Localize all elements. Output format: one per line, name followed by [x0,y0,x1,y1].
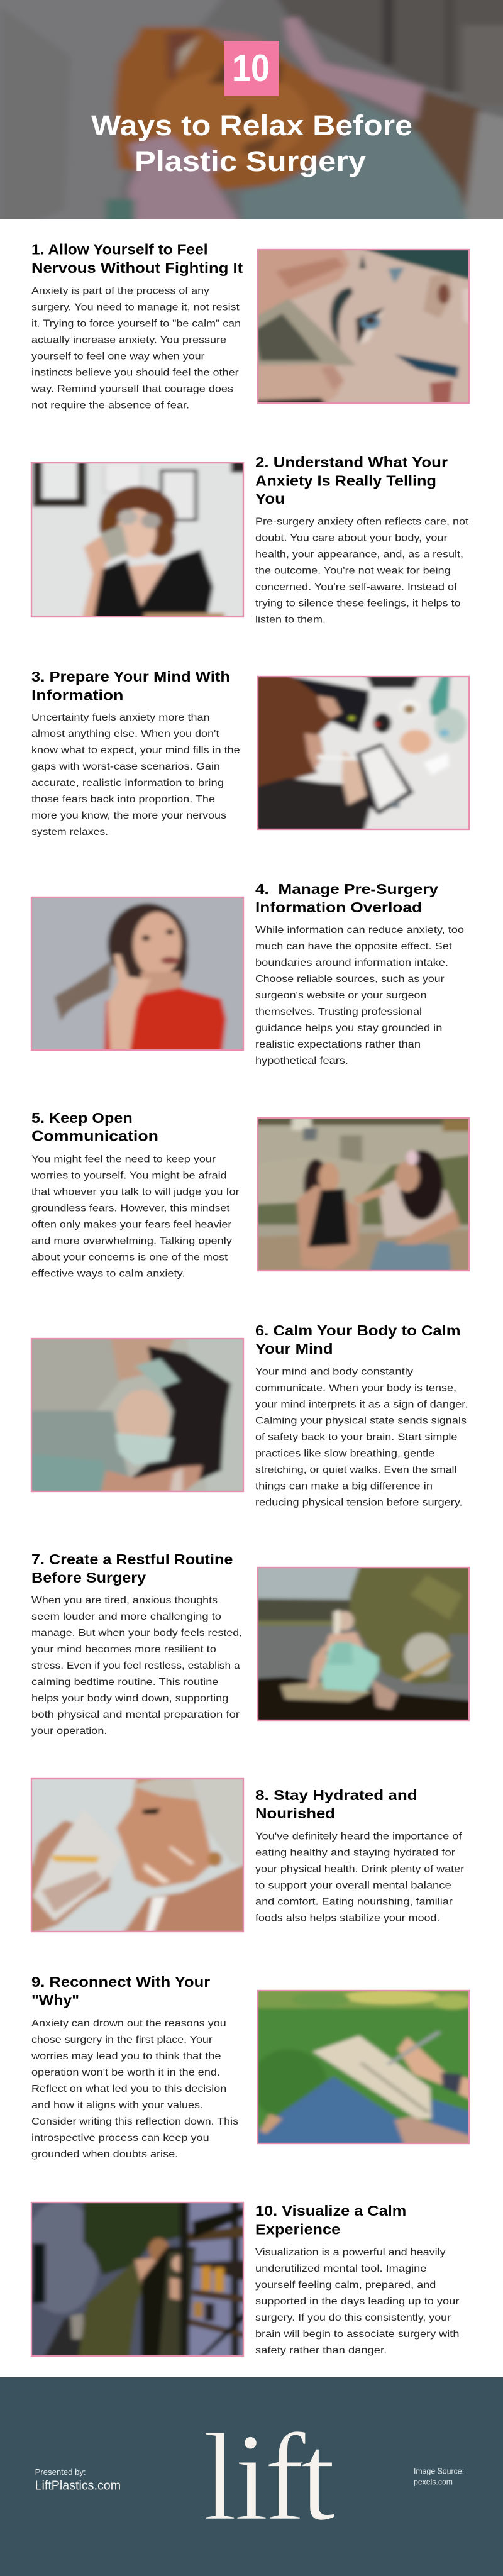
body text: step 6: Calming your physical state sends signals [255,1415,467,1426]
heading: step 8: Nourished [255,1805,335,1821]
body text: step 10: supported in the days leading up to your [255,2296,460,2307]
body text: step 10: underutilized mental tool. Imagine [255,2264,427,2274]
body text: step 3: more you know, the more your nervous [31,810,226,821]
heading: step 3: Information [31,687,123,703]
body text: step 8: foods also helps stabilize your mood. [255,1913,439,1923]
heading: step 7 [31,1551,233,1586]
body text: step 10 [255,2247,460,2356]
body text: step 1: not require the absence of fear. [31,401,189,411]
body text: step 1: actually increase anxiety. You pressure [31,335,226,346]
heading: step 10: Experience [255,2221,340,2237]
body text: step 5 [31,1154,240,1279]
panel: step 4 [19,881,464,1066]
title [91,109,412,177]
body text: step 2: trying to silence these feelings, it helps to [255,599,461,609]
body text: step 6 [255,1366,468,1508]
body text: step 6: things can make a big difference in [255,1481,433,1491]
body text: step 9: and how it aligns with your values. [31,2100,203,2111]
body text: step 1: way. Remind yourself that courage does [31,384,233,395]
heading: step 7: Before Surgery [31,1569,146,1586]
body text: step 2: concerned. You're self-aware. Instead of [255,582,458,592]
body text: step 4 [255,925,464,1066]
body text: step 1: surgery. You need to manage it, not resist [31,302,240,313]
heading: step 1 [31,241,243,276]
heading: step 5 [31,1110,158,1144]
image source credit: Image Source: [414,2466,464,2476]
body text: step 4: surgeon's website or your surgeon [255,990,426,1001]
body text: step 1: Anxiety is part of the process of any [31,286,209,297]
body text: step 5: groundless fears. However, this mindset [31,1203,230,1213]
body text: step 4: realistic expectations rather than [255,1039,421,1050]
image source credit: pexels.com [414,2477,453,2487]
body text: step 6: reducing physical tension before surgery. [255,1497,463,1508]
heading: step 9 [31,1974,210,2008]
title: Ways to Relax Before [91,109,412,141]
panel: step 1 [31,239,484,416]
body text: step 6: practices like slow breathing, gentle [255,1448,434,1459]
body text: step 9: grounded when doubts arise. [31,2149,178,2160]
photo: woman floating in bubble bath [30,1338,244,1493]
body text: step 8: to support your overall mental balance [255,1880,451,1891]
body text: step 6: Your mind and body constantly [255,1366,413,1377]
body text: step 8: eating healthy and staying hydrated for [255,1847,456,1858]
photo: eye makeup close-up [257,249,470,404]
body text: step 5: that whoever you talk to will judge you for [31,1186,240,1197]
body text: step 1: instincts believe you should feel the other [31,368,239,379]
body text: step 7: stress. Even if you feel restless, establish a [31,1661,240,1671]
body text: step 1: it. Trying to force yourself to "be calm" can [31,319,241,329]
heading: step 1: Nervous Without Fighting It [31,260,243,276]
title: Plastic Surgery [135,145,366,177]
body text: step 9: Consider writing this reflection down. This [31,2116,238,2127]
presented by credit: Presented by: [35,2467,86,2477]
body text: step 4: Choose reliable sources, such as your [255,974,445,985]
body text: step 5: worries to yourself. You might be afraid [31,1170,227,1181]
heading: step 4: 4. Manage Pre-Surgery [255,881,438,897]
body text: step 5: and more overwhelming. Talking openly [31,1235,232,1246]
body text: step 4: While information can reduce anxiety, too [255,925,464,936]
panel: step 9 [31,1974,484,2160]
body text: step 2: doubt. You care about your body, your [255,533,448,543]
heading: step 6: Your Mind [255,1341,333,1357]
heading: step 6 [255,1322,460,1357]
heading: step 7: 7. Create a Restful Routine [31,1551,233,1567]
logo: lift: lift [202,2408,336,2547]
body text: step 2: health, your appearance, and, as a result, [255,550,463,560]
body text: step 5: often only makes your fears feel heavier [31,1219,232,1230]
body text: step 2: Pre-surgery anxiety often reflects care, not [255,517,469,527]
body text: step 10: yourself feeling calm, prepared, and [255,2280,436,2291]
panel: step 3 [31,667,484,839]
body text: step 7: calming bedtime routine. This routine [31,1677,219,1688]
body text: step 4: hypothetical fears. [255,1056,348,1066]
heading: step 4 [255,881,438,915]
body text: step 9: Anxiety can drown out the reasons you [31,2018,226,2029]
presented by credit: LiftPlastics.com [35,2479,121,2493]
number badge [224,41,279,96]
heading: step 2: 2. Understand What Your [255,454,448,470]
heading: step 2: You [255,490,285,507]
heading: step 6: 6. Calm Your Body to Calm [255,1322,460,1339]
photo: thoughtful woman in red [30,897,244,1051]
body text: step 8: You've definitely heard the importance of [255,1831,462,1842]
body text: step 9: chose surgery in the first place. Your [31,2035,213,2045]
panel: step 7 [31,1551,484,1737]
footer panel [0,2377,503,2576]
heading: step 1: 1. Allow Yourself to Feel [31,241,208,258]
body text: step 3: gaps with worst-case scenarios. Gain [31,761,220,772]
body text: step 4: guidance helps you stay grounded in [255,1023,442,1034]
body text: step 6: your mind interprets it as a sign of danger. [255,1399,468,1410]
body text: step 3: those fears back into proportion. The [31,794,215,805]
body text: step 10: safety rather than danger. [255,2345,387,2356]
photo: woman in towel drinking water [30,1778,244,1933]
photo: person writing in a notebook on grass [257,1989,470,2144]
heading: step 10: 10. Visualize a Calm [255,2203,406,2219]
body text: step 1 [31,286,241,411]
body text: step 8: and comfort. Eating nourishing, familiar [255,1896,453,1907]
photo: tired woman with mug [30,462,244,617]
panel: step 2 [19,454,469,627]
panel: step 6 [19,1322,468,1508]
heading: step 3 [31,668,230,703]
body text: step 6: stretching, or quiet walks. Even the small [255,1464,456,1475]
body text: step 2 [255,517,469,625]
heading: step 8: 8. Stay Hydrated and [255,1787,417,1803]
body text: step 5: about your concerns is one of the most [31,1252,228,1263]
presented by credit [35,2467,121,2493]
heading: step 9: "Why" [31,1992,79,2008]
body text: step 1: yourself to feel one way when your [31,351,205,362]
panel: step 10 [30,2202,459,2357]
body text: step 7: both physical and mental preparation for [31,1710,240,1720]
body text: step 10: surgery. If you do this consistently, your [255,2313,451,2323]
body text: step 4: much can have the opposite effect. Set [255,941,452,952]
heading: step 4: Information Overload [255,899,422,915]
photo: woman studying at a desk [257,675,470,830]
body text: step 8 [255,1831,465,1923]
body text: step 9: Reflect on what led you to this decision [31,2084,226,2094]
heading: step 2: Anxiety Is Really Telling [255,472,436,489]
body text: step 4: boundaries around information intake. [255,958,448,968]
body text: step 7: manage. But when your body feels rested, [31,1628,242,1639]
body text: step 9 [31,2018,238,2160]
heading: step 2 [255,454,448,507]
body text: step 8: your physical health. Drink plenty of water [255,1864,465,1874]
body text: step 7: your operation. [31,1726,107,1737]
body text: step 9: operation won't be worth it in the end. [31,2067,220,2078]
body text: step 5: You might feel the need to keep your [31,1154,216,1164]
body text: step 7: helps your body wind down, supporting [31,1693,228,1704]
heading: step 5: Communication [31,1128,158,1144]
photo: woman resting by a lake [257,1567,470,1722]
body text: step 6: of safety back to your brain. Start simple [255,1432,458,1442]
body text: step 9: introspective process can keep you [31,2133,209,2143]
photo: two friends talking by a lake [257,1117,470,1271]
image source credit [414,2466,464,2487]
body text: step 7: seem louder and more challenging to [31,1611,221,1622]
panel: step 5 [31,1109,484,1281]
body text: step 10: brain will begin to associate surgery with [255,2329,459,2340]
body text: step 5: effective ways to calm anxiety. [31,1268,185,1279]
body text: step 4: themselves. Trusting professional [255,1007,422,1017]
panel: step 8 [30,1778,464,1933]
body text: step 9: worries may lead you to think that the [31,2051,221,2062]
body text: step 2: listen to them. [255,615,326,625]
heading: step 3: 3. Prepare Your Mind With [31,668,230,685]
heading: step 8 [255,1787,417,1821]
body text: step 3: Uncertainty fuels anxiety more than [31,712,210,723]
body text: step 10: Visualization is a powerful and heavily [255,2247,446,2258]
heading: step 9: 9. Reconnect With Your [31,1974,210,1990]
heading: step 10 [255,2203,406,2237]
body text: step 3: system relaxes. [31,827,108,837]
number badge: 10 [232,47,270,89]
heading: step 5: 5. Keep Open [31,1110,133,1126]
body text: step 7: When you are tired, anxious thoughts [31,1595,218,1606]
header banner [0,0,503,235]
body text: step 7: your mind becomes more resilient to [31,1644,216,1655]
body text: step 3: know what to expect, your mind fills in the [31,745,240,756]
body text: step 2: the outcome. You're not weak for being [255,566,451,576]
body text: step 3: almost anything else. When you don't [31,729,219,739]
body text: step 6: communicate. When your body is tense, [255,1383,456,1393]
hero photo: surgeon's gloved hands on patient's face [0,0,503,235]
body text: step 7 [31,1595,242,1737]
body text: step 3 [31,712,240,837]
photo: woman looking in a mirror [30,2202,244,2357]
body text: step 3: accurate, realistic information to bring [31,778,224,788]
